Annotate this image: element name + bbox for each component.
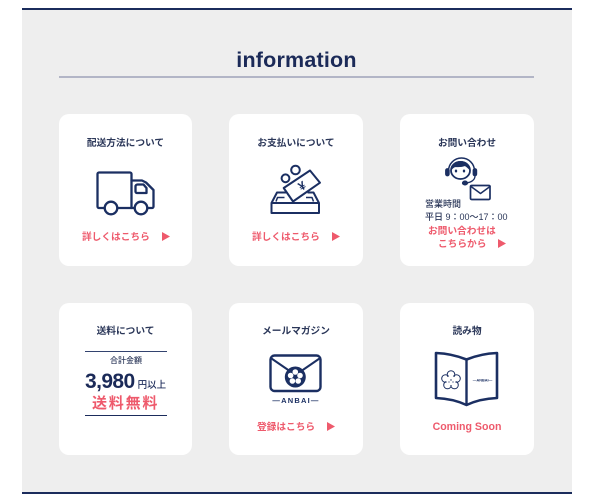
- heading: reading: 読み物: [452, 326, 482, 337]
- panel: mail magazine: [229, 303, 363, 455]
- text: business hours: 平日 9：00～17：00: [425, 212, 508, 222]
- label: free shipping: 送料無料: [92, 395, 159, 412]
- link: details: 詳しくはこちら: [82, 232, 150, 243]
- icon: delivery truck: [96, 171, 155, 216]
- panel: payment: [229, 114, 363, 266]
- title underline: [59, 76, 534, 78]
- logo text: ANBAI: ―ANBAI―: [272, 396, 320, 405]
- panel: shipping method: [59, 114, 192, 266]
- heading: mail magazine: メールマガジン: [262, 326, 330, 337]
- heading: shipping method: 配送方法について: [87, 138, 164, 149]
- link: details: 詳しくはこちら: [252, 232, 320, 243]
- link: contact here: お問い合わせは: [428, 226, 496, 237]
- heading: shipping fee: 送料について: [97, 326, 154, 337]
- label: coming soon: Coming Soon: [433, 421, 501, 433]
- link: contact here: [428, 226, 496, 250]
- panel: reading: [400, 303, 534, 455]
- icon: headset operator and envelope: [445, 157, 491, 200]
- icon: yen note and coin tray: ¥: [296, 178, 309, 194]
- label: total amount: 合計金額: [110, 356, 142, 365]
- rule top: [85, 351, 167, 352]
- icon: arrow: [327, 422, 335, 431]
- text: business hours: 営業時間: [425, 199, 461, 209]
- icon: arrow: [498, 239, 506, 248]
- link: register: 登録はこちら: [257, 422, 315, 433]
- title: information: [236, 48, 357, 72]
- rule bottom: [85, 415, 167, 416]
- icon: arrow: [332, 232, 340, 241]
- panel: shipping fee: [59, 303, 192, 455]
- icon: open book: ―ANBAI―: [473, 378, 493, 382]
- link: contact here: こちらから: [438, 239, 486, 250]
- icon: yen note and coin tray: [270, 164, 321, 214]
- heading: contact: お問い合わせ: [438, 138, 496, 149]
- text: business hours: [425, 199, 508, 222]
- amount: 3,980 yen or more: 3,980 円以上: [85, 370, 166, 393]
- icon: open book: [434, 352, 498, 406]
- panel: contact: [400, 114, 534, 266]
- icon: arrow: [162, 232, 170, 241]
- icon: envelope with plum seal: [269, 354, 322, 392]
- heading: payment: お支払いについて: [257, 138, 335, 149]
